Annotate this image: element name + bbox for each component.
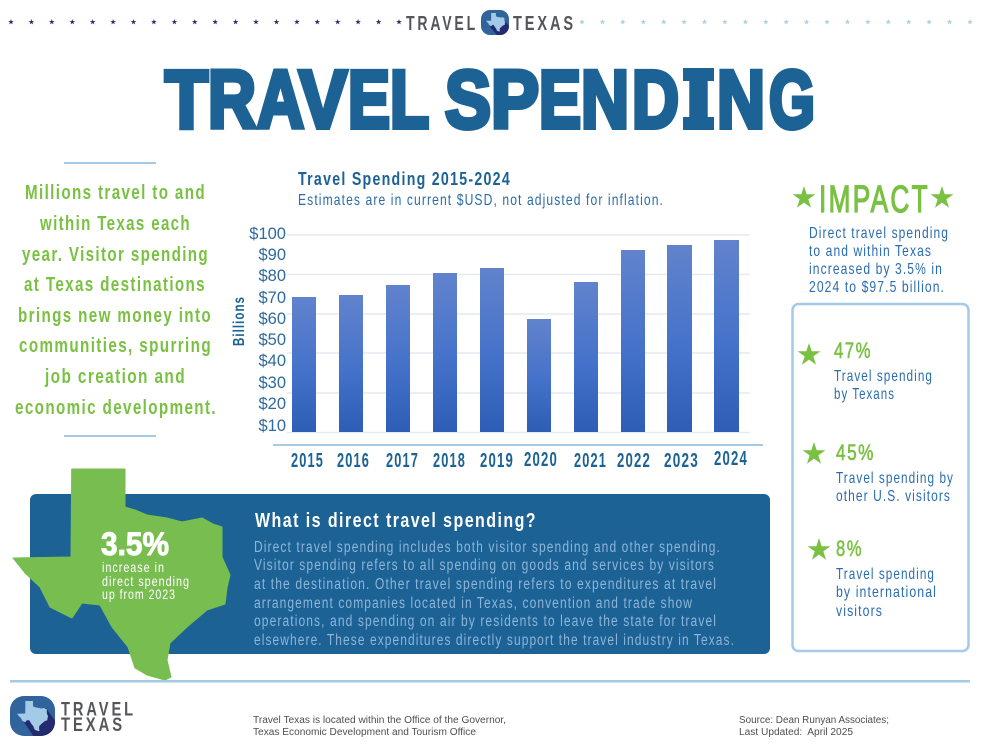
stat: 8 percent: visitors [836, 603, 883, 620]
stat: 47 percent: Travel spending [834, 368, 933, 385]
y axis labels: $30 [258, 374, 286, 392]
intro text block: year. Visitor spending [22, 244, 209, 266]
panel: what is direct travel spending [30, 494, 770, 654]
intro text block: Millions travel to and [25, 182, 206, 204]
chart heading: Travel Spending 2015-2024 [298, 169, 511, 189]
x axis year labels: 2020 [524, 449, 558, 471]
stat: 47 percent: 47% [834, 338, 872, 363]
y axis labels: $50 [258, 331, 286, 349]
x axis year labels: 2019 [480, 450, 514, 472]
stat: 8 percent: 8% [836, 536, 863, 561]
panel: what is direct travel spending: at the destination. Other travel spending refers to expenditures at travel [254, 576, 717, 593]
bars [292, 240, 739, 432]
y axis title: Billions [231, 296, 248, 346]
map of Texas with callout [13, 469, 230, 680]
chart heading [298, 169, 664, 209]
title: E [348, 54, 390, 146]
y axis labels: $10 [258, 417, 286, 435]
x axis year labels: 2024 [714, 448, 748, 470]
title [165, 54, 815, 146]
impact summary text [809, 225, 949, 296]
footer note: source: Source: Dean Runyan Associates; [739, 715, 889, 726]
x axis year labels [291, 448, 748, 472]
x axis year labels: 2018 [433, 450, 466, 472]
y axis labels: $100 [249, 225, 286, 243]
panel: what is direct travel spending: Direct travel spending includes both visitor spending and other spending. [254, 539, 721, 556]
footer note: source [739, 715, 889, 738]
panel: what is direct travel spending: What is direct travel spending? [255, 510, 537, 532]
top logo: Travel Texas: TRAVEL [406, 13, 478, 35]
footer logo: Travel Texas: TEXAS [61, 714, 125, 736]
title: E [539, 54, 581, 146]
stat: 8 percent [808, 536, 937, 620]
x axis year labels: 2023 [664, 450, 699, 472]
map of Texas with callout: up from 2023 [102, 586, 176, 602]
bar chart [231, 225, 763, 472]
title: V [299, 54, 347, 146]
intro text block [15, 162, 217, 437]
title: S [445, 54, 491, 146]
chart heading: Estimates are in current $USD, not adjusted for inflation. [298, 192, 664, 209]
title: G [769, 54, 815, 146]
top logo: Travel Texas [406, 10, 576, 35]
panel: what is direct travel spending: Visitor spending refers to all spending on goods and services by visitors [254, 557, 715, 574]
impact summary text: increased by 3.5% in [809, 261, 943, 278]
title: I [686, 54, 711, 146]
star row: left navy stars [8, 19, 402, 24]
title: N [581, 54, 629, 146]
panel: spending breakdown [792, 304, 968, 651]
panel: what is direct travel spending: operations, and spending on air by residents to leave the state for travel [254, 613, 717, 630]
footer note: source: Last Updated: April 2025 [739, 727, 853, 738]
y axis labels [249, 225, 286, 435]
x axis year labels: 2015 [291, 450, 324, 472]
map of Texas with callout: increase in [102, 559, 165, 575]
footer logo: Travel Texas: TRAVEL [61, 698, 136, 720]
y axis labels: $90 [258, 246, 286, 264]
title: D [632, 54, 679, 146]
footer note: Office of the Governor: Travel Texas is located within the Office of the Governor, [253, 715, 506, 726]
x axis year labels: 2022 [617, 450, 651, 472]
stat: 47 percent [798, 338, 933, 403]
title: L [390, 54, 428, 146]
intro text block: job creation and [44, 366, 186, 388]
panel: what is direct travel spending: arrangement companies located in Texas, convention and trade show [254, 595, 693, 612]
footer note: Office of the Governor: Texas Economic Development and Tourism Office [253, 727, 476, 738]
stat: 45 percent: 45% [836, 440, 875, 465]
impact summary text: 2024 to $97.5 billion. [809, 279, 945, 296]
stat: 8 percent: Travel spending [836, 566, 935, 583]
x axis year labels: 2016 [337, 450, 370, 472]
map of Texas with callout: 3.5% [101, 526, 169, 562]
intro text block: at Texas destinations [24, 274, 206, 296]
top logo: Travel Texas: TEXAS [513, 13, 576, 35]
y axis labels: $70 [258, 289, 286, 307]
title: N [717, 54, 765, 146]
impact summary text: to and within Texas [809, 243, 932, 260]
y axis labels: $80 [258, 267, 286, 285]
intro text block: brings new money into [18, 305, 212, 327]
stat: 47 percent: by Texans [834, 386, 895, 403]
star row: right light blue stars [579, 19, 973, 24]
footer note: Office of the Governor [253, 715, 506, 738]
title: R [208, 54, 256, 146]
title: T [165, 54, 208, 146]
intro text block: communities, spurring [19, 335, 212, 357]
title: P [491, 54, 539, 146]
x axis year labels: 2017 [386, 450, 419, 472]
x axis year labels: 2021 [574, 450, 607, 472]
stat: 8 percent: by international [836, 584, 937, 601]
impact heading: IMPACT [819, 179, 930, 221]
footer logo: Travel Texas [10, 696, 136, 737]
intro text block: within Texas each [39, 213, 191, 235]
map of Texas with callout: direct spending [102, 573, 190, 589]
stat: 45 percent [803, 440, 954, 505]
y axis labels: $60 [258, 310, 286, 328]
y axis labels: $20 [258, 395, 286, 413]
title: A [257, 54, 304, 146]
y axis labels: $40 [258, 352, 286, 370]
intro text block: economic development. [15, 397, 217, 419]
panel: what is direct travel spending: elsewhere. These expenditures directly support the travel industry in Texas. [254, 632, 735, 649]
